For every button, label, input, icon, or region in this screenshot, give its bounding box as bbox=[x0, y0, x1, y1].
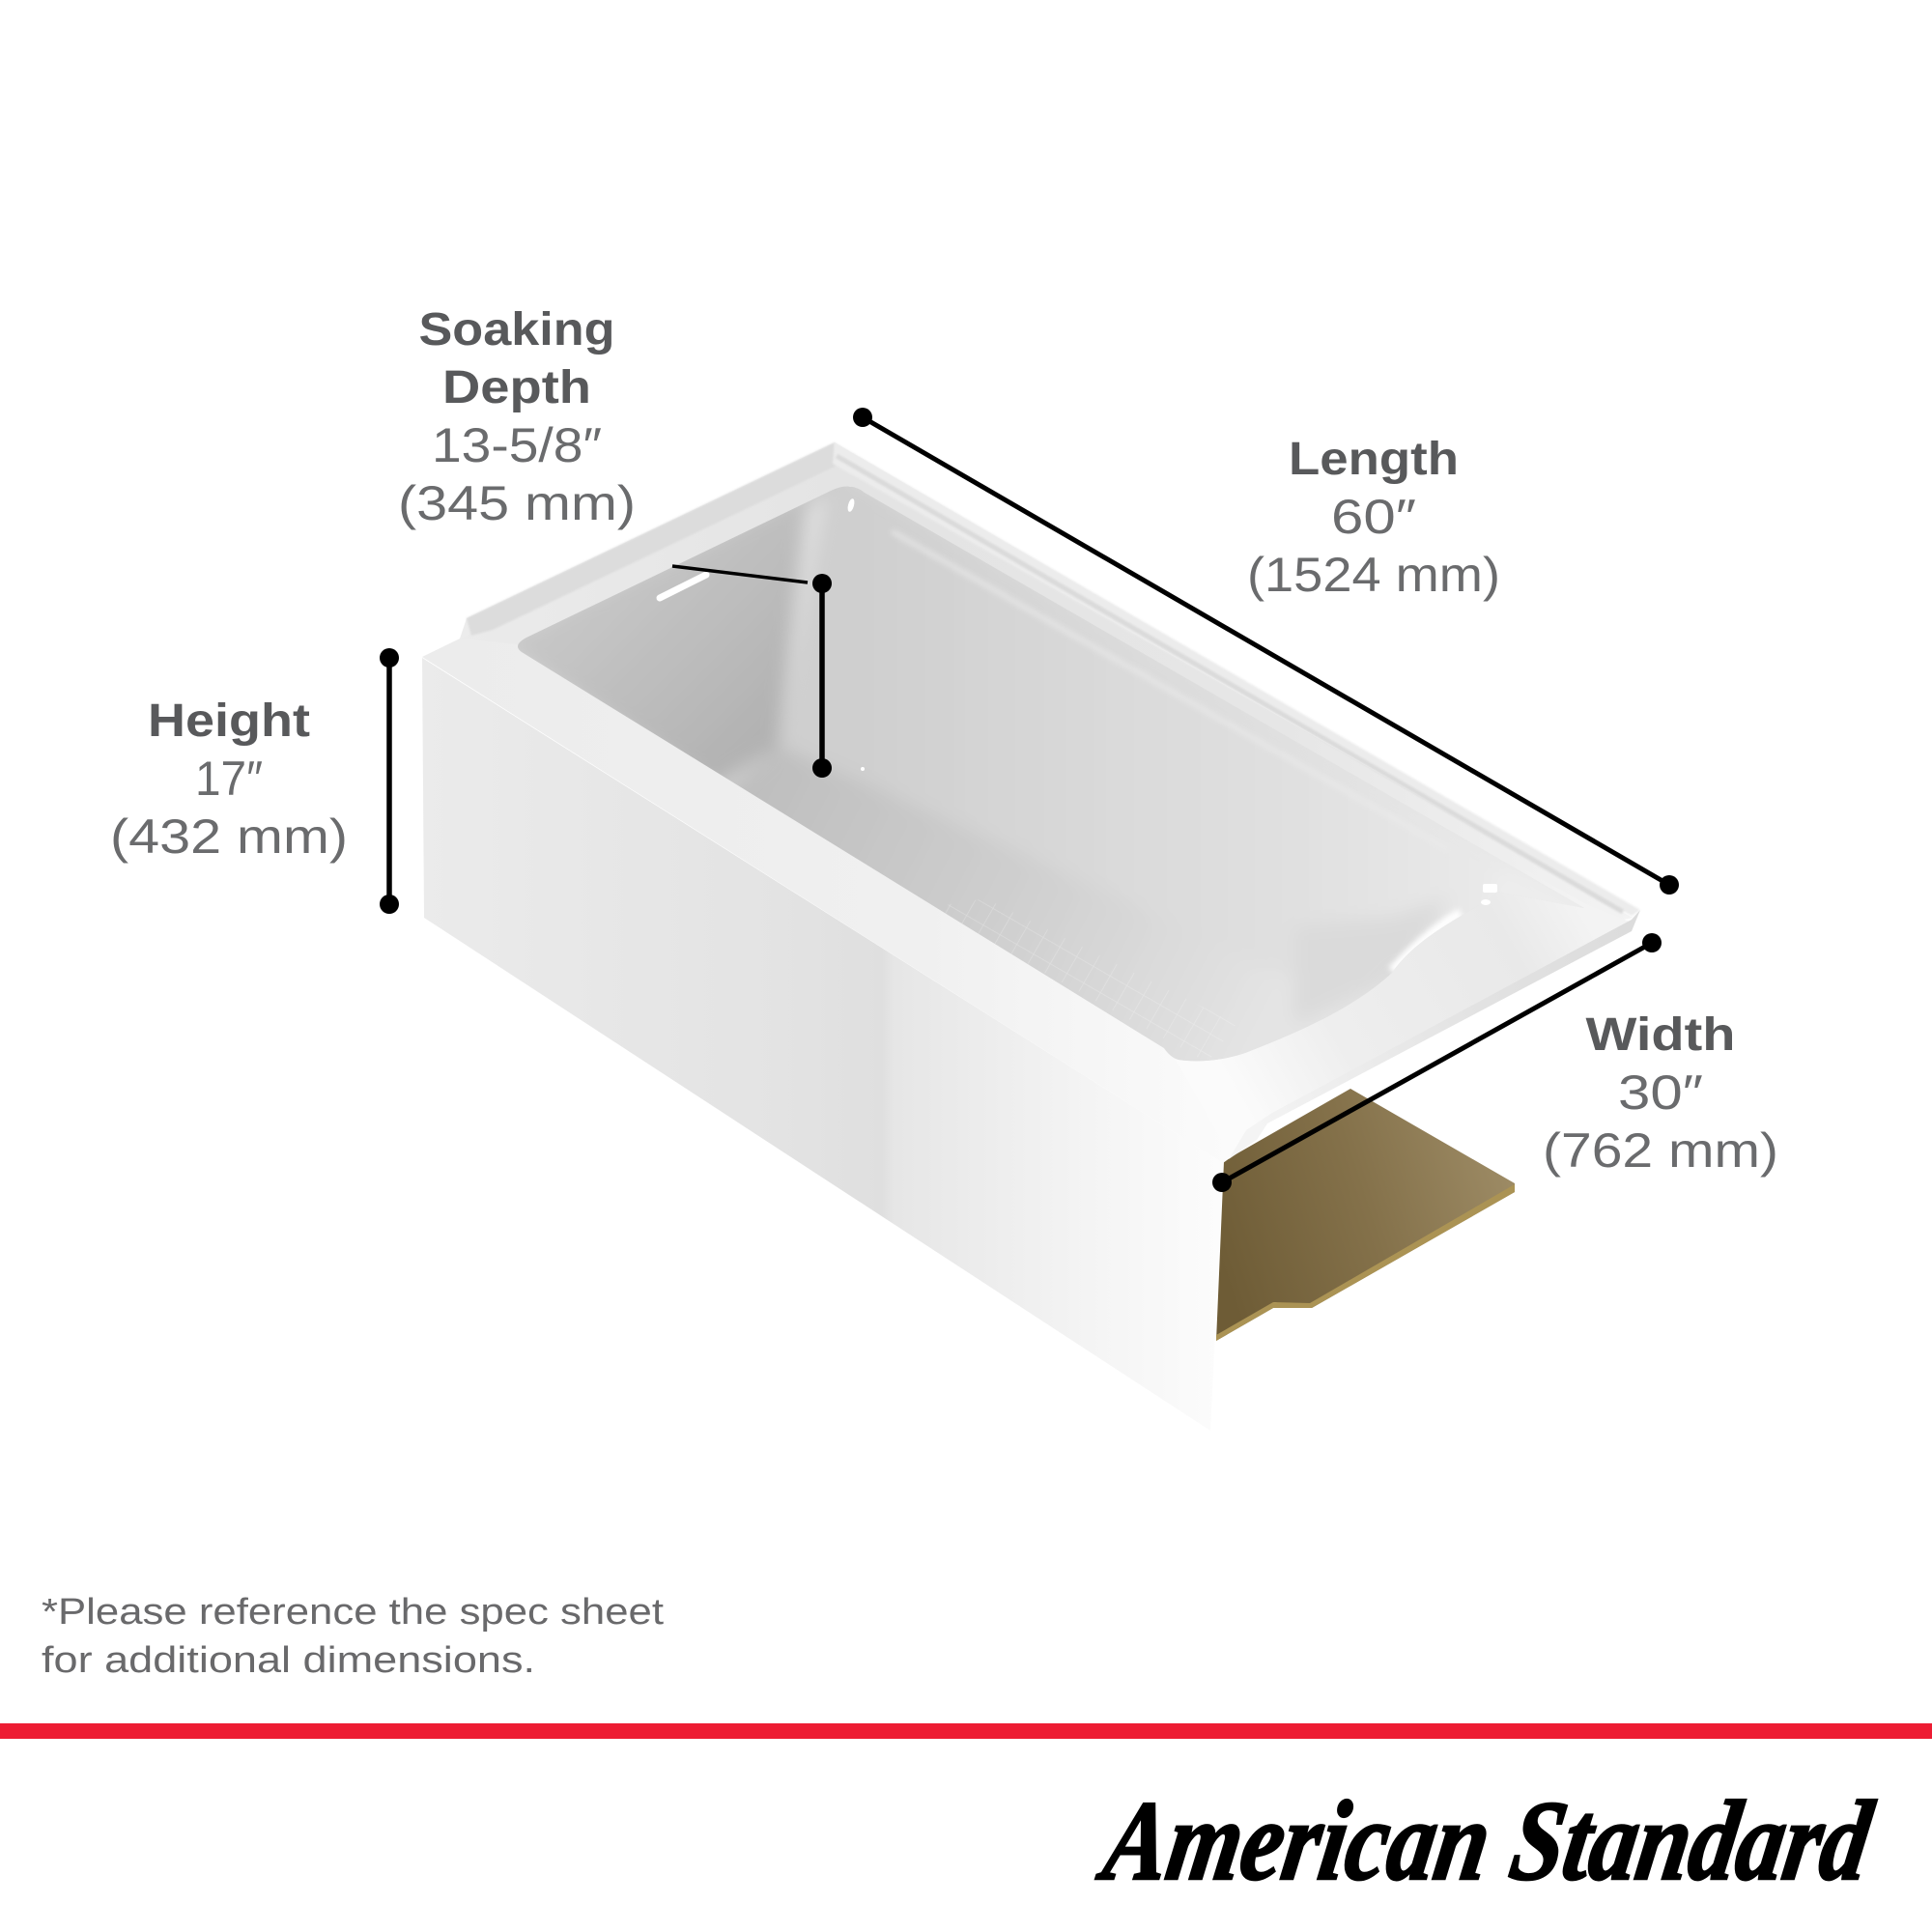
red divider bar bbox=[0, 1723, 1932, 1739]
rear deck bbox=[460, 462, 1633, 927]
wood support base bbox=[1216, 1089, 1515, 1341]
bathtub illustration bbox=[422, 442, 1642, 1431]
rear wall light line bbox=[893, 531, 1094, 647]
label: soaking depth: Depth bbox=[442, 362, 591, 413]
headrest highlight bbox=[1392, 913, 1461, 971]
label: height: Height bbox=[148, 696, 310, 747]
footnote: for additional dimensions. bbox=[42, 1640, 535, 1681]
tub deck bbox=[422, 442, 1639, 1163]
underside strip bbox=[1229, 910, 1640, 1159]
floor tread pattern bbox=[945, 900, 1173, 1032]
back flange band bbox=[467, 442, 837, 636]
basin bbox=[518, 487, 1581, 1061]
length dimension line bbox=[853, 408, 1679, 895]
label: length: Length bbox=[1289, 434, 1459, 485]
side flange band bbox=[833, 442, 1640, 916]
label: height: 17″ bbox=[195, 752, 263, 806]
label: length bbox=[1247, 434, 1500, 602]
label: soaking depth: (345 mm) bbox=[398, 476, 636, 530]
footnote: *Please reference the spec sheet bbox=[42, 1592, 665, 1633]
label: height: (432 mm) bbox=[110, 810, 348, 864]
label: width: 30″ bbox=[1618, 1065, 1703, 1120]
footnote bbox=[42, 1592, 665, 1681]
label: soaking depth: Soaking bbox=[419, 304, 614, 355]
width dimension line bbox=[1212, 933, 1662, 1192]
soaking depth dimension line bbox=[672, 566, 832, 778]
label: length: 60″ bbox=[1331, 490, 1416, 544]
label: width bbox=[1543, 1009, 1778, 1178]
height dimension line bbox=[380, 648, 399, 914]
label: width: Width bbox=[1586, 1009, 1735, 1061]
right end deck bbox=[1169, 860, 1632, 1150]
label: length: (1524 mm) bbox=[1247, 548, 1500, 602]
label: width: (762 mm) bbox=[1543, 1123, 1778, 1178]
label: soaking depth: 13-5/8″ bbox=[432, 418, 602, 472]
glossy specks bbox=[846, 497, 1497, 905]
front apron panel bbox=[422, 658, 1223, 1431]
overflow slot bbox=[660, 575, 706, 598]
label: soaking depth bbox=[398, 304, 636, 530]
label: height bbox=[110, 696, 348, 864]
